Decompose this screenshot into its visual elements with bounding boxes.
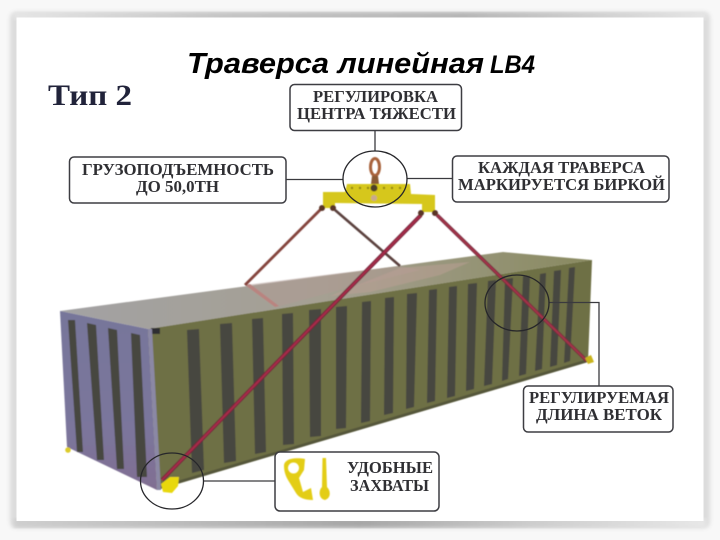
- title: Траверса линейная: [187, 48, 484, 80]
- callout: convenient grabs: УДОБНЫЕ: [347, 458, 433, 477]
- container roof: [60, 252, 592, 329]
- container side face: [148, 260, 592, 490]
- callout: centre of gravity: ЦЕНТРА ТЯЖЕСТИ: [297, 104, 456, 123]
- corner grab, far right: [585, 355, 594, 364]
- callout: adjustable legs: ДЛИНА ВЕТОК: [536, 405, 662, 424]
- left sling: [245, 208, 322, 285]
- callout: tag marking: МАРКИРУЕТСЯ БИРКОЙ: [458, 175, 665, 194]
- container and lifting beam illustration: [60, 158, 594, 493]
- icon: pin grab: [320, 458, 330, 500]
- callout: adjustable legs: [524, 386, 673, 432]
- callout: centre of gravity: [290, 84, 462, 130]
- corner grab, far left: [65, 447, 71, 453]
- heading: type 2: Тип 2: [48, 79, 132, 112]
- corner grab, front: [161, 477, 179, 493]
- callout: centre of gravity: РЕГУЛИРОВКА: [313, 87, 438, 106]
- callout: convenient grabs: ЗАХВАТЫ: [350, 476, 429, 495]
- beam holes: [351, 187, 401, 189]
- beam shackles: [319, 205, 438, 216]
- callout: tag marking: [452, 156, 669, 202]
- callout: tag marking: КАЖДАЯ ТРАВЕРСА: [478, 158, 645, 177]
- detail circles: [140, 151, 549, 509]
- right sling: [437, 215, 587, 361]
- callout: convenient grabs: [275, 452, 439, 511]
- rear sling: [335, 210, 400, 266]
- callout: capacity: ДО 50,0ТН: [136, 177, 219, 196]
- callout: capacity: ГРУЗОПОДЪЕМНОСТЬ: [82, 160, 274, 179]
- callout: adjustable legs: РЕГУЛИРУЕМАЯ: [529, 388, 669, 407]
- lifting link: [370, 158, 380, 201]
- crossing sling: [162, 215, 421, 480]
- callout: capacity: [70, 157, 286, 203]
- title suffix: LB4: [490, 51, 535, 79]
- container end face: [60, 311, 157, 490]
- icon: hook grab: [284, 458, 313, 500]
- lifting beam: [323, 184, 435, 212]
- callout connectors: [203, 130, 599, 481]
